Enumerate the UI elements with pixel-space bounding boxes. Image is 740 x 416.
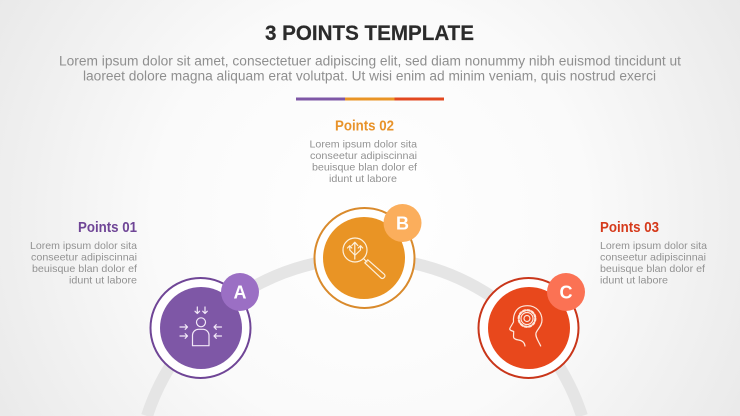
body: points 03: conseetur adipiscinnai [600,252,706,264]
heading: points 01: Points 01 [78,220,137,236]
heading: points 03: Points 03 [600,220,659,236]
body: points 01: Lorem ipsum dolor sita [30,240,137,252]
body: points 02: idunt ut labore [329,173,397,185]
panel: points 01 text [30,220,137,286]
intro text block: laoreet dolore magna aliquam erat volutpat. Ut wisi enim ad minim veniam, quis nostrud exerci [83,68,656,84]
icon: person receiving inward arrows [180,307,222,346]
node A: purple circle [150,273,259,378]
body: points 01: conseetur adipiscinnai [31,252,137,264]
icon: head with gear [510,306,542,346]
body: points 01: beuisque blan dolor ef [32,263,137,275]
body: points 03: idunt ut labore [600,274,668,286]
intro text block [59,54,681,84]
body: points 03: beuisque blan dolor ef [600,263,705,275]
intro text block: Lorem ipsum dolor sit amet, consectetuer adipiscing elit, sed diam nonummy nibh euismod tincidunt ut [59,54,681,68]
body: points 01: idunt ut labore [69,274,137,286]
background arc [147,258,582,416]
panel: points 02 text [310,118,417,185]
body: points 02 [310,138,417,185]
node C: red circle [478,273,585,378]
body: points 01 [30,240,137,286]
body: points 02: conseetur adipiscinnai [310,150,417,162]
body: points 02: Lorem ipsum dolor sita [310,138,417,150]
panel: points 03 text [600,220,707,286]
body: points 02: beuisque blan dolor ef [312,162,417,174]
node B: orange circle [314,204,422,308]
icon: magnifier with diverging arrows [343,238,385,278]
body: points 03 [600,240,707,286]
badge B: B [396,214,409,234]
badge C: C [560,282,572,302]
tri-colour divider [296,98,444,100]
body: points 03: Lorem ipsum dolor sita [600,240,707,252]
badge A: A [234,282,246,302]
heading: points 02: Points 02 [335,118,394,134]
title: 3 POINTS TEMPLATE [265,22,474,45]
